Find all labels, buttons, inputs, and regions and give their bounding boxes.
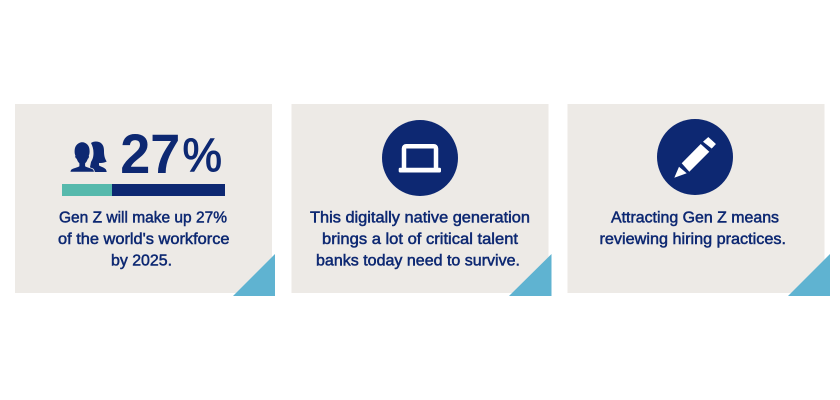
corner triangle — [788, 254, 830, 296]
icon: laptop — [382, 120, 458, 196]
progress bar — [62, 184, 225, 196]
icon: people — [70, 141, 107, 172]
panel: digitally native — [292, 104, 552, 296]
text block: Attracting Gen Z means — [611, 210, 779, 226]
panel: hiring practices — [568, 104, 830, 296]
panel: 27% workforce — [15, 104, 275, 296]
icon: pencil — [657, 119, 733, 195]
corner triangle — [509, 254, 552, 296]
text block: brings a lot of critical talent — [322, 231, 519, 248]
stat: 27% — [120, 122, 222, 185]
text block — [310, 210, 530, 270]
text block: by 2025. — [111, 252, 172, 270]
text block — [600, 210, 786, 248]
text block: reviewing hiring practices. — [600, 231, 786, 248]
text block: of the world's workforce — [58, 231, 230, 248]
text block: banks today need to survive. — [316, 252, 520, 270]
corner triangle — [233, 254, 275, 296]
stat: 27%: % — [182, 128, 222, 181]
stat: 27%: 27 — [120, 122, 180, 185]
text block: This digitally native generation — [310, 210, 530, 226]
text block: Gen Z will make up 27% — [59, 210, 227, 226]
text block — [58, 210, 230, 270]
